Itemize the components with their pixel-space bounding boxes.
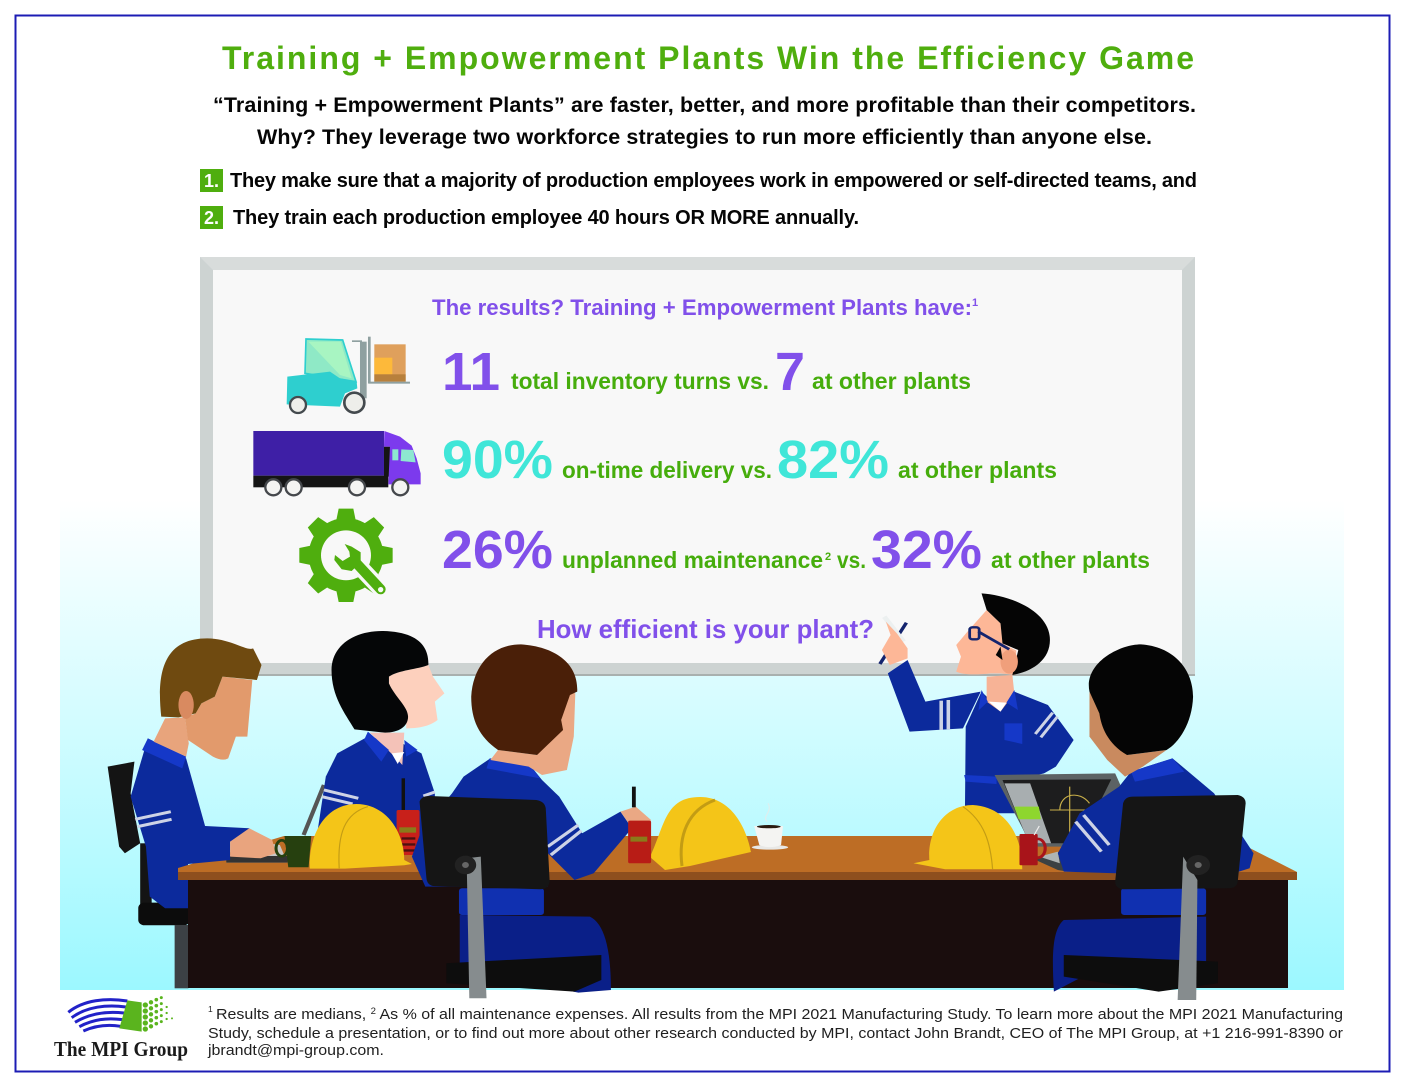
icon: gear and wrench [299, 509, 393, 602]
panel: whiteboard [200, 257, 1195, 676]
person: seated from back, center [412, 644, 651, 998]
laptop: right [995, 773, 1121, 872]
mug: green [276, 836, 311, 867]
closing question: How efficient is your plant? [537, 614, 874, 644]
footnote: jbrandt@mpi-group.com. [207, 1042, 384, 1059]
stat row: unplanned maintenance: unplanned maintenance [562, 547, 823, 573]
stat row: inventory turns: 7 [775, 342, 805, 402]
title: Training + Empowerment Plants Win the Efficiency Game [222, 40, 1194, 76]
strategy 2: 2. [204, 208, 219, 228]
footnote: 2 [371, 1006, 376, 1016]
icon: truck [253, 431, 421, 495]
logo: The MPI Group: The MPI Group [54, 1037, 188, 1061]
stat row: on-time delivery: 90% [442, 430, 553, 490]
stat row: unplanned maintenance: vs. [837, 547, 866, 573]
stat row: on-time delivery [442, 430, 1057, 490]
footnote: 1 [208, 1004, 213, 1014]
stat row: unplanned maintenance: at other plants [991, 547, 1150, 573]
stat row: on-time delivery: at other plants [898, 457, 1057, 483]
person: man with laptop [108, 638, 324, 988]
table body [188, 880, 1288, 988]
table edge [178, 872, 1297, 880]
intro text [213, 93, 1196, 149]
person: presenter [880, 593, 1074, 813]
stat row: inventory turns: at other plants [812, 368, 971, 394]
results heading: The results? Training + Empowerment Plants have: [432, 295, 972, 320]
stat row: on-time delivery: 82% [777, 430, 889, 490]
logo: The MPI Group [54, 996, 188, 1061]
hard hat: right [914, 805, 1022, 869]
footnote: As % of all maintenance expenses. All results from the MPI 2021 Manufacturing Study. To learn more about the MPI 2021 Manufacturing [376, 1006, 1343, 1023]
person: arm and hand on laptop [157, 826, 288, 864]
stat row: unplanned maintenance [442, 520, 1150, 580]
person: woman [316, 631, 444, 840]
scene background [60, 500, 1344, 990]
strategy 1: 1. [204, 171, 219, 191]
results heading: 1 [972, 297, 978, 309]
coffee cup [752, 803, 788, 850]
footnote: Study, schedule a presentation, or to find out more about other research conducted by MPI, contact John Brandt, CEO of The MPI Group, at +1 216-991-8390 or [208, 1025, 1343, 1042]
strategy 2: They train each production employee 40 hours OR MORE annually. [233, 207, 859, 229]
intro text: Why? They leverage two workforce strategies to run more efficiently than anyone else. [257, 125, 1152, 149]
hard hat: left [310, 804, 412, 869]
stat row: unplanned maintenance: 2 [825, 551, 831, 563]
stat row: inventory turns [442, 342, 971, 402]
hard hat: center [650, 797, 751, 870]
footnote [207, 1004, 1343, 1059]
cup: red [1019, 826, 1045, 865]
footnote: Results are medians, [216, 1006, 357, 1023]
person: seated from back, right [1053, 644, 1254, 1000]
stat row: unplanned maintenance: 32% [871, 520, 982, 580]
icon: forklift [287, 337, 410, 413]
stat row: unplanned maintenance: 26% [442, 520, 553, 580]
stat row: on-time delivery: on-time delivery vs. [562, 457, 772, 483]
radio: left [397, 778, 420, 855]
intro text: “Training + Empowerment Plants” are faster, better, and more profitable than their competitors. [213, 93, 1196, 117]
stat row: inventory turns: 11 [442, 342, 500, 402]
strategy 1: They make sure that a majority of production employees work in empowered or self-directed teams, and [230, 170, 1197, 192]
stat row: inventory turns: total inventory turns vs. [511, 368, 769, 394]
table top [178, 836, 1297, 880]
